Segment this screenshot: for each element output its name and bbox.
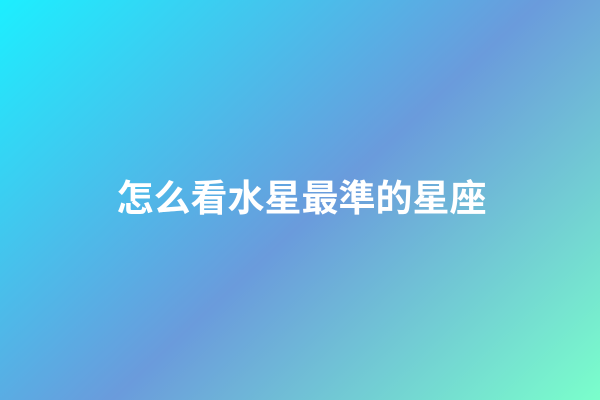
title: 怎么看水星最準的星座 bbox=[116, 178, 486, 219]
